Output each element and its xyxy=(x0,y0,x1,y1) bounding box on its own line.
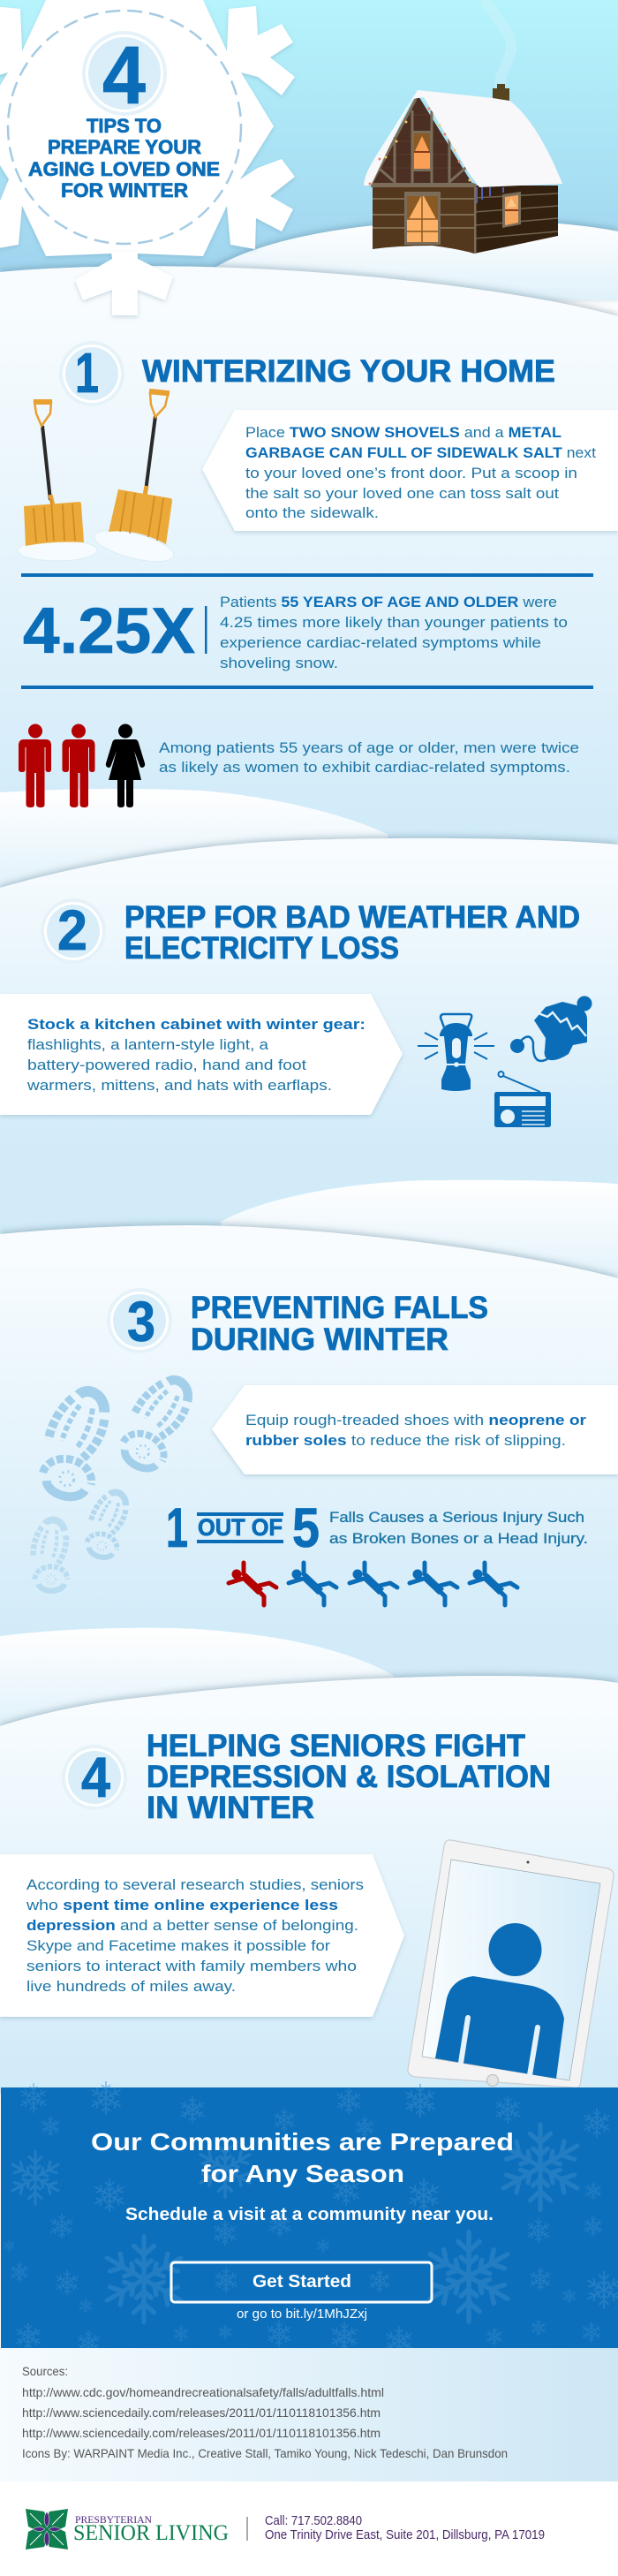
title: FOR WINTER xyxy=(61,179,188,201)
stat: 4.25X: 4.25 times more likely than younger patients to xyxy=(220,614,568,631)
hill: behind house xyxy=(216,221,618,300)
icon: footprints xyxy=(33,1370,197,1591)
house illustration xyxy=(364,84,562,254)
stat: 1 out of 5: OUT OF xyxy=(198,1514,283,1541)
icon: lantern xyxy=(418,1014,494,1091)
snowflake: bottom arm over the snow xyxy=(75,252,173,315)
callout: online experience: live hundreds of miles away. xyxy=(26,1978,236,1995)
section 2 heading: PREP FOR BAD WEATHER AND xyxy=(124,900,580,935)
section 4 heading: HELPING SENIORS FIGHT xyxy=(147,1729,525,1763)
icon: right snow shovel xyxy=(92,389,177,568)
panel: section 3 background xyxy=(0,1225,618,1731)
smoke from chimney xyxy=(485,0,511,88)
logo mark xyxy=(26,2509,68,2549)
panel: section 1 background xyxy=(0,266,618,894)
section 1 heading: WINTERIZING YOUR HOME xyxy=(142,354,555,389)
callout: treaded shoes: rubber soles to reduce the risk of slipping. xyxy=(245,1432,566,1449)
stat: 1 out of 5: 5 xyxy=(292,1497,320,1559)
snowflake pattern xyxy=(3,2082,618,2355)
callout: snow shovels and salt: onto the sidewalk. xyxy=(245,504,379,521)
snowflake shape xyxy=(0,0,295,259)
callout: snow shovels and salt: GARBAGE CAN FULL OF SIDEWALK SALT next xyxy=(245,444,596,461)
callout: winter gear: Stock a kitchen cabinet with winter gear: xyxy=(27,1016,366,1033)
icon: winter hat xyxy=(510,996,592,1061)
callout: winter gear: battery-powered radio, hand and foot xyxy=(27,1057,306,1073)
panel: sources: Sources: xyxy=(22,2364,68,2378)
section 1 number: 1 xyxy=(75,341,99,405)
stat: 1 out of 5 xyxy=(166,1497,588,1559)
background: winter sky xyxy=(0,0,618,292)
section 3 heading: PREVENTING FALLS xyxy=(191,1291,488,1325)
stat: 1 out of 5: Falls Causes a Serious Injury Such xyxy=(329,1509,584,1526)
panel: section 4 background xyxy=(0,1676,618,2094)
contact details: Call: 717.502.8840 xyxy=(265,2513,362,2528)
icon: two men and one woman xyxy=(19,724,145,807)
logo wordmark: PRESBYTERIAN xyxy=(75,2513,152,2526)
callout: snow shovels and salt: Place TWO SNOW SHOVELS and a METAL xyxy=(245,424,561,441)
callout: treaded shoes xyxy=(212,1385,618,1474)
icon: falling figures xyxy=(229,1563,517,1605)
contact details: One Trinity Drive East, Suite 201, Dillsburg, PA 17019 xyxy=(265,2527,545,2542)
title: PREPARE YOUR xyxy=(48,136,201,158)
stat: 1 out of 5: 1 xyxy=(166,1497,188,1559)
section 4 heading: IN WINTER xyxy=(147,1791,314,1825)
section 4 number: 4 xyxy=(81,1746,110,1809)
callout: online experience: According to several research studies, seniors xyxy=(26,1876,364,1893)
text: men vs women: as likely as women to exhibit cardiac-related symptoms. xyxy=(159,759,570,776)
section 1 number xyxy=(59,341,124,406)
section 3 number xyxy=(107,1288,172,1353)
panel: sources: http://www.sciencedaily.com/releases/2011/01/110118101356.htm xyxy=(22,2426,381,2440)
title: TIPS TO xyxy=(87,115,162,137)
icon: woman xyxy=(106,724,145,807)
panel: sources xyxy=(0,2348,618,2481)
panel: section 2 background xyxy=(0,838,618,1281)
callout: winter gear: flashlights, a lantern-style light, a xyxy=(27,1036,269,1053)
stat: 1 out of 5: as Broken Bones or a Head Injury. xyxy=(329,1530,588,1547)
banner heading: Our Communities are Prepared xyxy=(91,2128,514,2156)
stat: 4.25X: Patients 55 YEARS OF AGE AND OLDER were xyxy=(220,594,557,610)
callout: snow shovels and salt: to your loved one’s front door. Put a scoop in xyxy=(245,465,577,481)
callout: online experience: depression and a better sense of belonging. xyxy=(26,1917,358,1934)
section 2 number: 2 xyxy=(57,898,87,962)
callout: online experience: Skype and Facetime makes it possible for xyxy=(26,1937,330,1954)
section 3 number: 3 xyxy=(127,1290,155,1353)
button: get started: Get Started xyxy=(252,2272,351,2292)
button: get started xyxy=(171,2262,432,2302)
banner subheading: Schedule a visit at a community near you. xyxy=(125,2205,494,2224)
panel: call to action banner xyxy=(1,2082,618,2355)
hill: section 2 right xyxy=(221,1180,618,1290)
text: men vs women: Among patients 55 years of age or older, men were twice xyxy=(159,739,579,756)
section 3 heading xyxy=(191,1291,488,1357)
dashed ring xyxy=(8,11,241,244)
icon: left snow shovel xyxy=(18,399,97,561)
panel: sources: http://www.cdc.gov/homeandrecreationalsafety/falls/adultfalls.html xyxy=(22,2385,384,2399)
callout: online experience: who spent time online experience less xyxy=(26,1897,338,1913)
panel: call to action banner: for Any Season xyxy=(201,2160,404,2187)
number circle xyxy=(82,29,167,121)
section 4 number xyxy=(62,1745,127,1810)
section 4 heading: DEPRESSION & ISOLATION xyxy=(147,1760,551,1794)
callout: winter gear: warmers, mittens, and hats with earflaps. xyxy=(26,1077,332,1094)
short link: or go to bit.ly/1MhJZxj xyxy=(237,2307,367,2322)
section 4 heading xyxy=(147,1729,551,1825)
section 2 heading: ELECTRICITY LOSS xyxy=(124,931,399,966)
stat: 4.25X xyxy=(23,594,568,671)
logo wordmark: SENIOR LIVING xyxy=(73,2521,229,2545)
hill: section 1 bottom left xyxy=(0,789,388,894)
callout: treaded shoes: Equip rough-treaded shoes with neoprene or xyxy=(245,1412,586,1428)
section 3 heading: DURING WINTER xyxy=(191,1322,448,1357)
icon: radio xyxy=(494,1072,551,1127)
title xyxy=(28,115,220,201)
icon: tablet with person xyxy=(408,1840,614,2087)
stat: 4.25X: shoveling snow. xyxy=(220,655,338,671)
panel: sources: http://www.sciencedaily.com/releases/2011/01/110118101356.htm xyxy=(22,2406,381,2420)
callout: winter gear xyxy=(0,994,403,1115)
callout: online experience xyxy=(0,1854,404,2017)
callout: snow shovels and salt xyxy=(202,410,618,531)
text: men vs women xyxy=(159,739,579,776)
hero snowflake badge xyxy=(0,0,295,259)
section 2 number xyxy=(41,898,106,964)
number circle: 4 xyxy=(102,29,146,121)
hill: section 3 bottom left xyxy=(0,1628,394,1731)
callout: online experience: seniors to interact with family members who xyxy=(26,1958,357,1974)
section 2 heading xyxy=(124,900,580,966)
stat: 4.25X: experience cardiac-related symptoms while xyxy=(220,634,541,651)
panel: sources: Icons By: WARPAINT Media Inc., Creative Stall, Tamiko Young, Nick Tedeschi, Dan Brunsdon xyxy=(22,2446,508,2460)
contact details xyxy=(265,2513,545,2542)
stat: 4.25X: 4.25X xyxy=(23,595,195,667)
title: AGING LOVED ONE xyxy=(28,158,220,180)
callout: snow shovels and salt: the salt so your loved one can toss salt out xyxy=(245,485,559,502)
panel: footer xyxy=(0,2481,618,2576)
